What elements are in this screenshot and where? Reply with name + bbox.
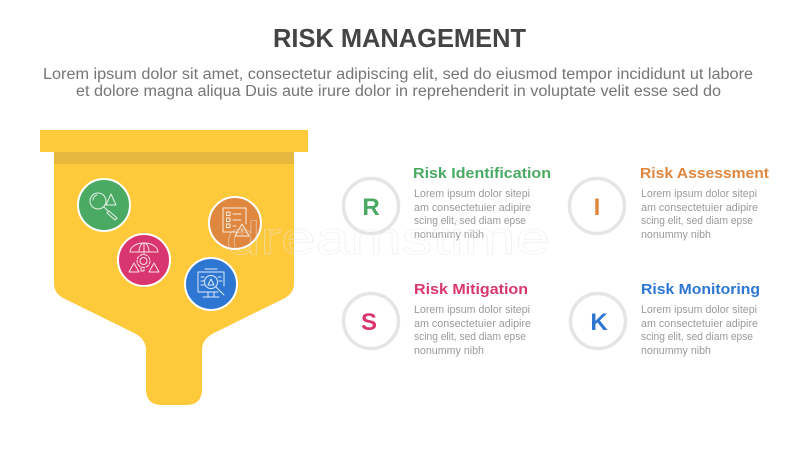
item: risk mitigation xyxy=(344,281,531,357)
description: am consectetuier adipire xyxy=(414,202,531,214)
funnel body xyxy=(54,152,294,405)
item: risk assessment xyxy=(570,165,769,241)
subtitle text: Lorem ipsum dolor sit amet, consectetur adipiscing elit, sed do eiusmod tempor incididunt ut labore xyxy=(43,66,753,83)
description: scing elit, sed diam epse xyxy=(414,215,526,227)
description xyxy=(641,304,758,357)
heading: Risk Identification xyxy=(413,165,551,182)
description: Lorem ipsum dolor sitepi xyxy=(641,304,757,316)
heading: Risk Mitigation xyxy=(414,281,528,298)
badge S: S xyxy=(361,309,377,336)
subtitle text: et dolore magna aliqua Duis aute irure dolor in reprehenderit in voluptate velit esse sed do xyxy=(76,83,721,100)
description: Lorem ipsum dolor sitepi xyxy=(414,304,530,316)
funnel xyxy=(40,130,308,405)
badge K xyxy=(570,294,626,348)
heading: Risk Assessment xyxy=(640,165,769,182)
description: scing elit, sed diam epse xyxy=(641,331,753,343)
description: am consectetuier adipire xyxy=(641,318,758,330)
description: nonummy nibh xyxy=(641,345,711,357)
title: RISK MANAGEMENT xyxy=(273,23,526,53)
watermark: dreamstime xyxy=(226,212,550,264)
icon: checklist and warning on orange circle xyxy=(209,197,261,249)
description: am consectetuier adipire xyxy=(641,202,758,214)
funnel rim xyxy=(40,130,308,152)
funnel inner shadow band xyxy=(54,152,294,164)
badge R: R xyxy=(362,194,380,221)
description: scing elit, sed diam epse xyxy=(414,331,526,343)
icon: magnifier and warning on green circle xyxy=(78,179,130,231)
item: risk identification xyxy=(344,165,551,241)
description: Lorem ipsum dolor sitepi xyxy=(414,188,530,200)
description: nonummy nibh xyxy=(414,345,484,357)
description: scing elit, sed diam epse xyxy=(641,215,753,227)
heading: Risk Monitoring xyxy=(641,281,760,298)
item: risk monitoring xyxy=(570,281,760,357)
description: nonummy nibh xyxy=(641,229,711,241)
icon: umbrella, gear and warnings on pink circle xyxy=(118,234,170,286)
description: am consectetuier adipire xyxy=(414,318,531,330)
description: Lorem ipsum dolor sitepi xyxy=(641,188,757,200)
icon: monitor with magnifier on blue circle xyxy=(185,258,237,310)
badge I: I xyxy=(594,194,600,221)
badge S xyxy=(344,294,398,348)
badge I xyxy=(570,178,624,234)
description xyxy=(641,188,758,241)
badge K: K xyxy=(590,309,608,336)
subtitle text xyxy=(43,66,753,100)
description xyxy=(414,188,531,241)
badge R xyxy=(344,178,398,234)
description xyxy=(414,304,531,357)
description: nonummy nibh xyxy=(414,229,484,241)
